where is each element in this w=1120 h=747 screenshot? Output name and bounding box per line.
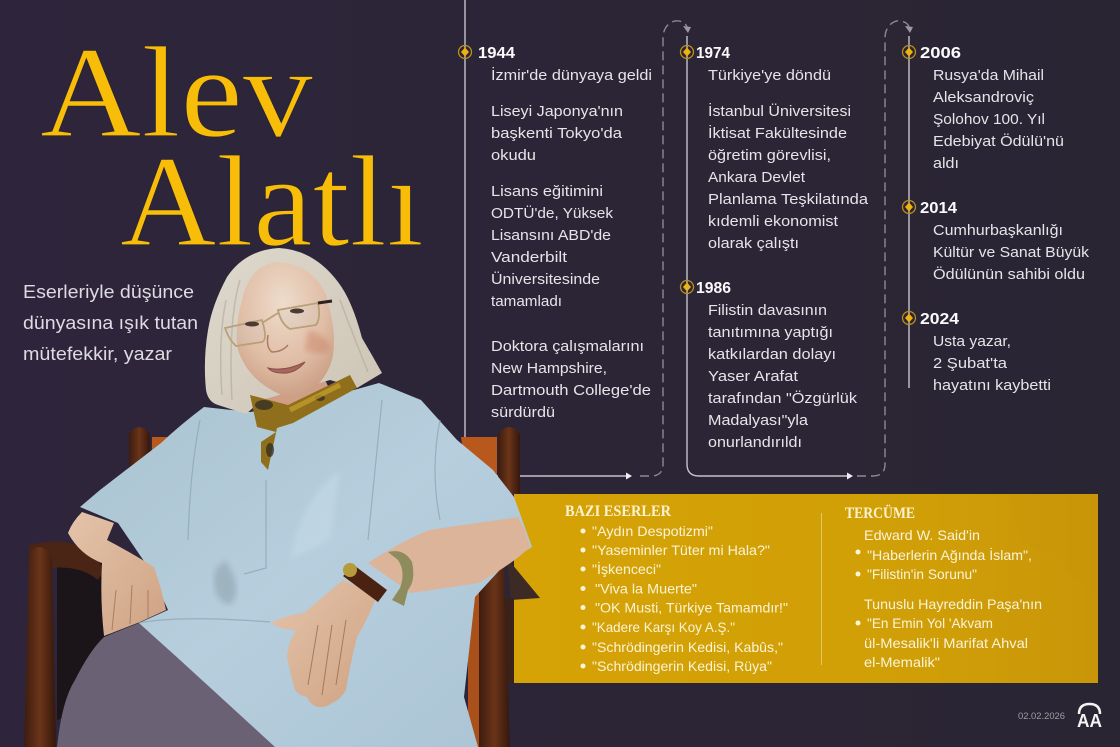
year 1944: 1944: [478, 45, 515, 62]
entry text 1944: Üniversitesinde: [491, 270, 600, 288]
entry text 2024: 2 Şubat'ta: [933, 355, 1008, 372]
entry text 1986: [708, 302, 858, 451]
year 1986: 1986: [696, 280, 731, 297]
neck: [255, 380, 335, 420]
entry text 2014: Cumhurbaşkanlığı: [933, 222, 1063, 239]
subtitle: Eserleriyle düşünce: [23, 282, 194, 302]
entry text 1986: tarafından "Özgürlük: [708, 389, 858, 407]
entry text 2006: [933, 67, 1064, 172]
marker 1944: [458, 46, 472, 58]
year 1974: 1974: [696, 45, 730, 62]
entry text 1944: Liseyi Japonya'nın: [491, 103, 623, 120]
hair: [205, 248, 382, 414]
entry text 1974: olarak çalıştı: [708, 235, 799, 252]
marker 1986: [680, 280, 694, 294]
list: translations: el-Memalik": [864, 654, 940, 670]
entry text 1944: tamamladı: [491, 293, 562, 310]
bracelet: [388, 551, 413, 606]
list: translations: Tunuslu Hayreddin Paşa'nın: [864, 596, 1042, 612]
marker 2024: [902, 312, 916, 324]
list: translations: "Filistin'in Sorunu": [867, 566, 977, 582]
nose and mouth: [268, 335, 305, 373]
timeline column 3: [902, 45, 1090, 394]
entry text 1986: Filistin davasının: [708, 302, 827, 319]
entry text 1944: okudu: [491, 147, 536, 164]
entry text 1986: katkılardan dolayı: [708, 346, 836, 363]
eyes: [245, 308, 304, 326]
entry text 2006: Aleksandroviç: [933, 89, 1035, 106]
marker 1974: [680, 46, 694, 58]
panel: works and translations: [514, 494, 1098, 683]
list: selected works: "Aydın Despotizmi": [592, 523, 713, 539]
subtitle: dünyasına ışık tutan: [23, 313, 198, 333]
list: selected works: "İşkenceci": [592, 560, 661, 577]
timeline column 1: [458, 45, 652, 421]
list: selected works: "Viva la Muerte": [595, 580, 697, 596]
timeline column 2: [680, 45, 869, 451]
entry text 1944: Vanderbilt: [491, 249, 568, 266]
marker 2006: [902, 46, 916, 58]
entry text 2006: Rusya'da Mihail: [933, 67, 1044, 84]
entry text 1944: başkenti Tokyo'da: [491, 125, 623, 142]
list: selected works: "Kadere Karşı Koy A.Ş.": [592, 619, 735, 635]
scarf: [250, 375, 357, 470]
face: [237, 262, 334, 398]
list: selected works: "Yaseminler Tüter mi Hala?": [592, 542, 770, 558]
entry text 1944: [491, 66, 652, 421]
arm: her left arm: [368, 517, 530, 593]
trousers: [57, 623, 280, 747]
entry text 2024: [933, 333, 1051, 394]
entry text 1986: onurlandırıldı: [708, 434, 802, 451]
shirt folds: [139, 400, 440, 623]
entry text 1944: Dartmouth College'de: [491, 382, 651, 399]
entry text 2006: aldı: [933, 155, 959, 172]
list: selected works: "Schrödingerin Kedisi, Kabûs,": [592, 639, 783, 655]
year 2024: 2024: [920, 311, 959, 328]
entry text 1986: Yaser Arafat: [708, 368, 799, 385]
band background: [514, 494, 1098, 683]
entry text 1944: Lisans eğitimini: [491, 183, 603, 200]
entry text 1944: İzmir'de dünyaya geldi: [491, 66, 652, 84]
entry text 1974: İstanbul Üniversitesi: [708, 102, 851, 120]
entry text 2006: Şolohov 100. Yıl: [933, 111, 1045, 128]
date: 02.02.2026: [1018, 711, 1065, 721]
entry text 2006: Edebiyat Ödülü'nü: [933, 132, 1064, 150]
list: selected works: "Schrödingerin Kedisi, Rüya": [592, 658, 772, 674]
heading: translations: TERCÜME: [845, 504, 915, 522]
list: translations: "Haberlerin Ağında İslam",: [867, 546, 1032, 563]
entry text 1986: Madalyası"yla: [708, 412, 809, 429]
entry text 2014: Kültür ve Sanat Büyük: [933, 244, 1090, 261]
entry text 1944: Doktora çalışmalarını: [491, 338, 644, 355]
list: selected works: "OK Musti, Türkiye Tamamdır!": [595, 600, 788, 616]
entry text 2014: [933, 222, 1090, 283]
wristwatch: [343, 566, 387, 602]
arm: her right arm and hand: [68, 512, 166, 636]
entry text 1974: Planlama Teşkilatında: [708, 191, 869, 208]
portrait: seated woman in chair: [24, 248, 540, 747]
list: translations: Edward W. Said'in: [864, 527, 980, 543]
entry text 2024: Usta yazar,: [933, 333, 1011, 350]
entry text 1974: kıdemli ekonomist: [708, 213, 839, 230]
logo: AA: AA: [1077, 711, 1102, 731]
subtitle: [23, 282, 198, 364]
year 2006: 2006: [920, 45, 961, 62]
timeline connector lines: [465, 0, 913, 480]
entry text 1944: Lisansını ABD'de: [491, 227, 611, 244]
entry text 1974: Türkiye'ye döndü: [708, 67, 831, 84]
entry text 1944: sürdürdü: [491, 404, 555, 421]
title: Alev: [40, 21, 313, 165]
entry text 1974: öğretim görevlisi,: [708, 147, 831, 164]
entry text 1944: New Hampshire,: [491, 360, 607, 377]
list: translations: "En Emin Yol 'Akvam: [867, 615, 993, 631]
entry text 2024: hayatını kaybetti: [933, 377, 1051, 394]
title: Alatlı: [120, 130, 424, 274]
heading: selected works: BAZI ESERLER: [565, 503, 671, 520]
entry text 1974: Ankara Devlet: [708, 169, 806, 186]
entry text 1974: İktisat Fakültesinde: [708, 124, 847, 142]
entry text 2014: Ödülünün sahibi oldu: [933, 265, 1085, 283]
title: [40, 21, 424, 274]
entry text 1944: ODTÜ'de, Yüksek: [491, 204, 614, 222]
glasses: [225, 303, 319, 346]
subtitle: mütefekkir, yazar: [23, 344, 172, 364]
list: selected works: [565, 503, 788, 674]
marker 2014: [902, 200, 916, 214]
year 2014: 2014: [920, 200, 957, 217]
chair: [24, 427, 540, 747]
entry text 1986: tanıtımına yaptığı: [708, 324, 833, 341]
entry text 1974: [708, 67, 869, 252]
list: translations: [845, 504, 1042, 670]
list: translations: ül-Mesalik'li Marifat Ahval: [864, 635, 1028, 651]
hand: her left hand: [271, 580, 377, 707]
shirt: [80, 383, 532, 747]
